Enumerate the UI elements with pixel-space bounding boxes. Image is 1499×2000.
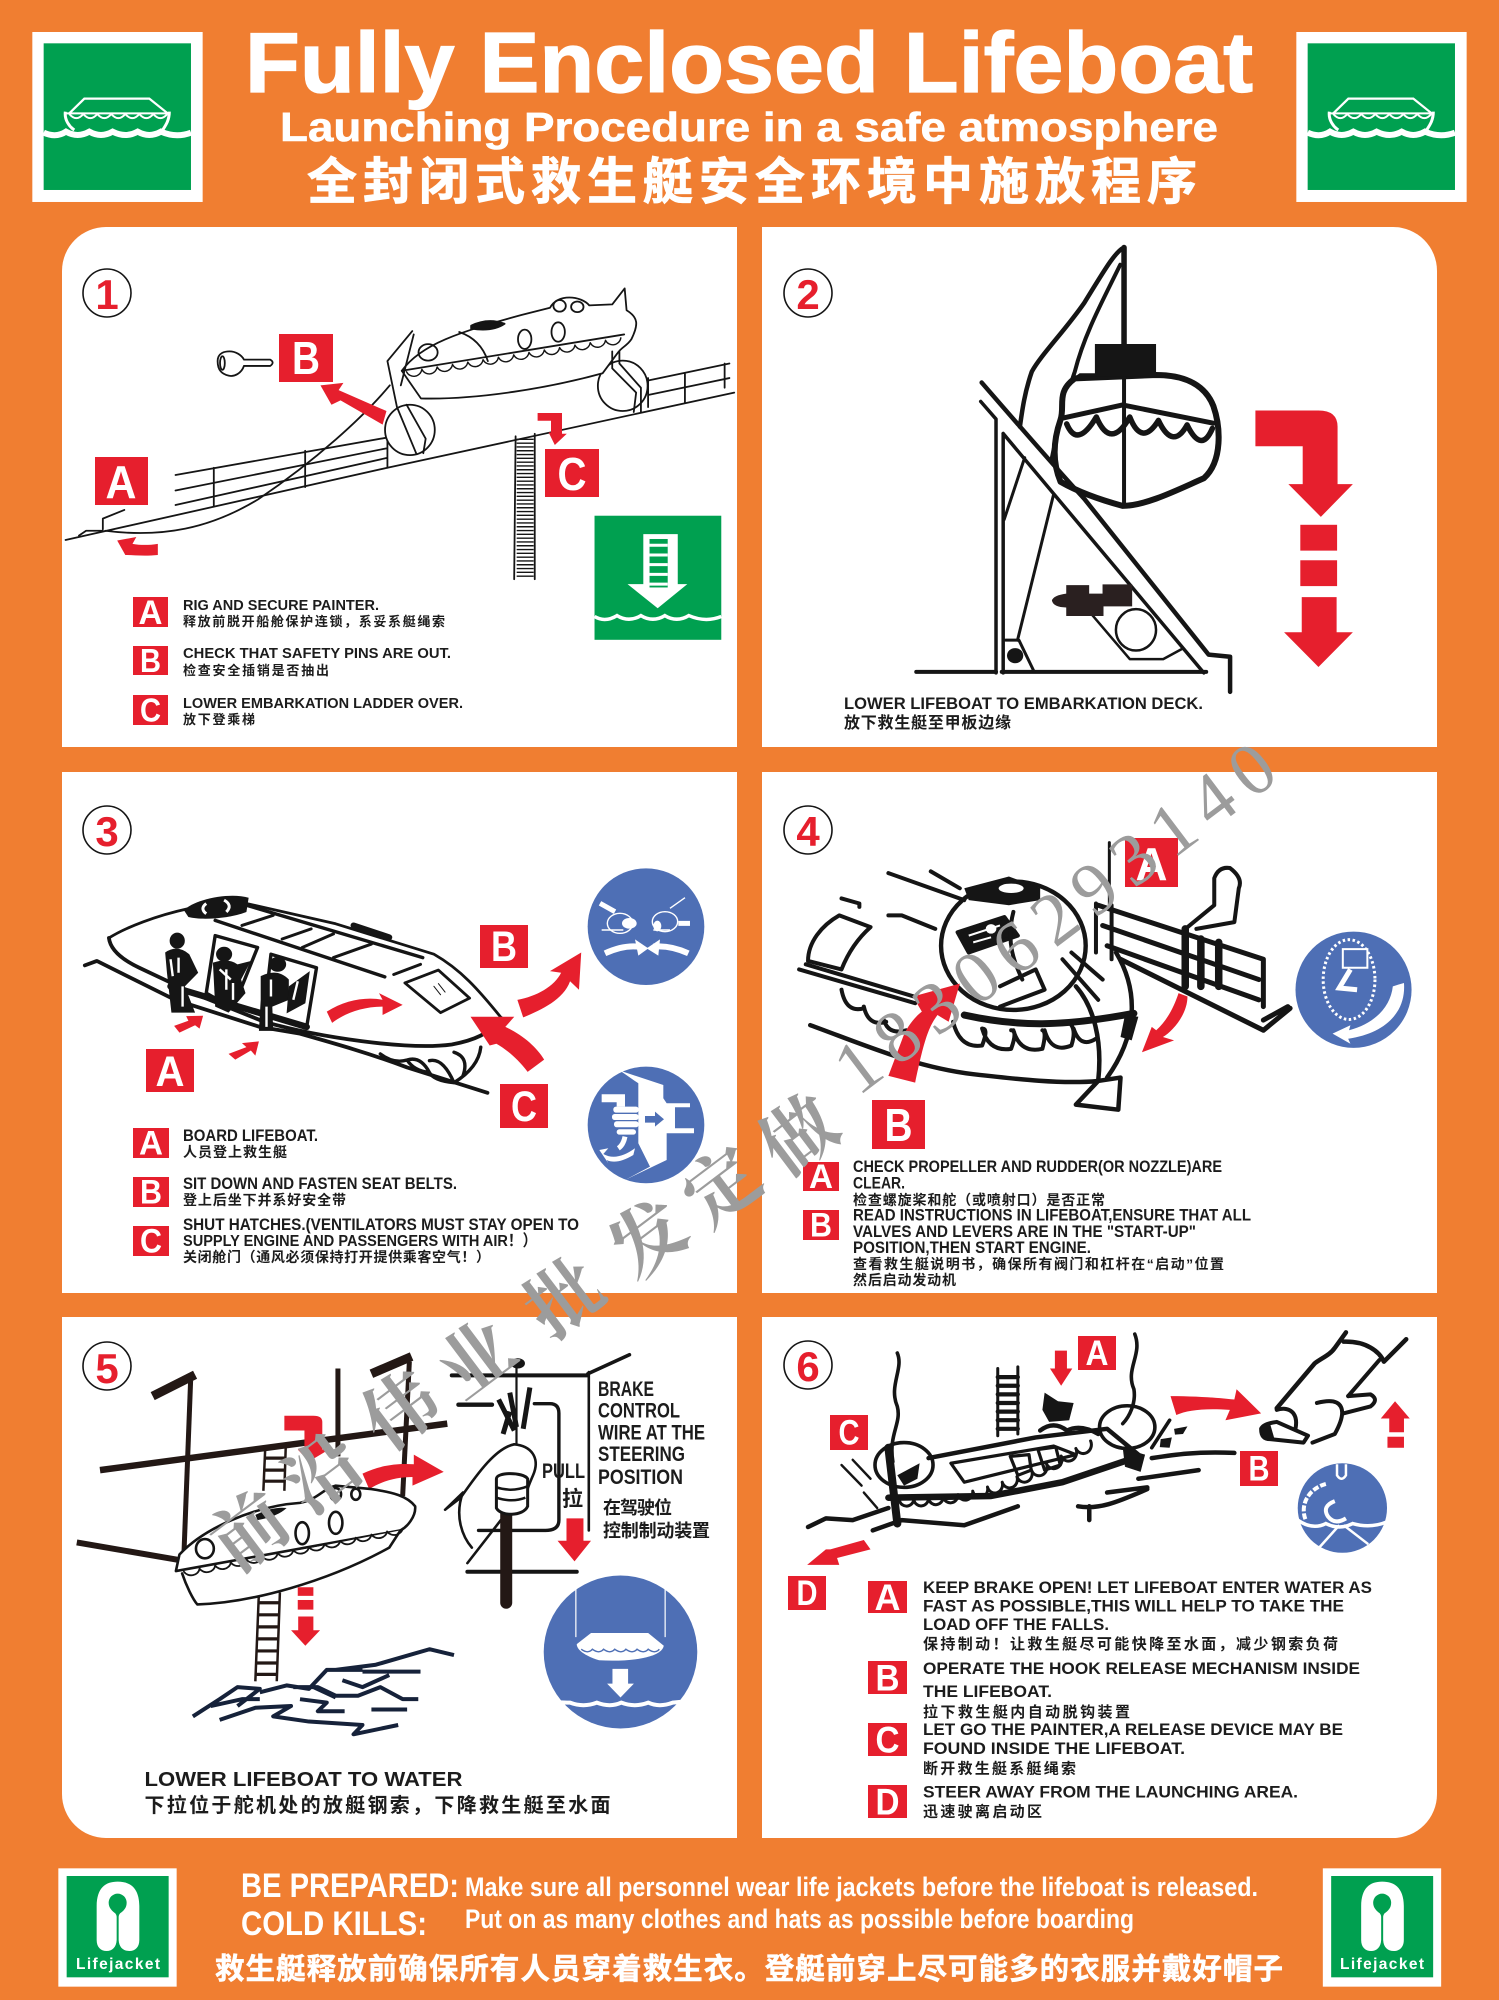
arrow C (538, 413, 567, 445)
legend item A (803, 1158, 1222, 1208)
illustration: boarding the lifeboat (85, 896, 502, 1093)
caption: step 5 (144, 1769, 610, 1817)
legend item B: VALVES AND LEVERS ARE IN THE "START-UP" (853, 1223, 1196, 1241)
legend item A: CLEAR. (853, 1174, 905, 1192)
icon: fasten seat belts (588, 868, 704, 985)
label C (830, 1414, 868, 1452)
legend item B: OPERATE THE HOOK RELEASE MECHANISM INSIDE (923, 1659, 1360, 1678)
label D: D (796, 1574, 818, 1613)
watermark: 发 (595, 1185, 704, 1295)
arrows: step 4 (888, 984, 1187, 1083)
legend item C: LOWER EMBARKATION LADDER OVER. (183, 696, 463, 712)
legend item A: BOARD LIFEBOAT. (183, 1127, 318, 1145)
legend item A: FAST AS POSSIBLE,THIS WILL HELP TO TAKE THE (923, 1596, 1344, 1616)
subtitle english: Launching Procedure in a safe atmosphere (280, 104, 1218, 150)
illustration: lifeboat lowered on davit (916, 248, 1230, 692)
legend item C: C (140, 692, 161, 728)
icon: safety pin key (218, 351, 273, 376)
icon: lower lifeboat to water (539, 1576, 702, 1728)
footer text: be prepared: Make sure all personnel wear life jackets before the lifeboat is released. (465, 1872, 1258, 1902)
legend item C (133, 692, 463, 728)
legend item A: 保持制动！让救生艇尽可能快降至水面，减少钢索负荷 (923, 1635, 1338, 1653)
watermark: 18306293140 (819, 726, 1292, 1111)
legend item B: THE LIFEBOAT. (923, 1682, 1052, 1701)
legend item C: SHUT HATCHES.(VENTILATORS MUST STAY OPEN TO (183, 1216, 579, 1234)
legend item D (868, 1782, 1298, 1822)
icon: lifejacket sign left: Lifejacket (76, 1956, 160, 1973)
watermark: 批 (511, 1245, 620, 1355)
label A (1125, 838, 1178, 890)
label B: B (1248, 1450, 1270, 1488)
legend item B: 然后启动发动机 (853, 1272, 956, 1288)
watermark: 业 (423, 1306, 532, 1416)
icon: close hatches (588, 1067, 704, 1183)
legend item B (803, 1206, 1251, 1288)
legend item A: 释放前脱开船舱保护连锁，系妥系艇绳索 (183, 614, 445, 629)
legend item A: A (809, 1158, 833, 1196)
watermark: 做 (746, 1082, 855, 1192)
legend item A: A (139, 1124, 163, 1162)
step number 1 (83, 269, 131, 318)
step number 4: 4 (796, 808, 820, 855)
arrow: pull down (558, 1518, 591, 1561)
legend item A: A (874, 1577, 900, 1618)
label B (872, 1099, 925, 1151)
legend item C: LET GO THE PAINTER,A RELEASE DEVICE MAY BE (923, 1720, 1343, 1739)
illustration: frame, ladder and lifeboat (77, 1356, 447, 1681)
label A (146, 1048, 194, 1096)
pull label: PULL (542, 1460, 585, 1483)
brake control text: WIRE AT THE (598, 1422, 705, 1444)
label A: A (156, 1048, 184, 1096)
label C: C (838, 1414, 860, 1452)
legend item D: 迅速驶离启动区 (923, 1802, 1042, 1820)
legend item C: C (140, 1222, 162, 1260)
icon: lifejacket sign left (58, 1868, 177, 1987)
arrows: step 3 (174, 953, 581, 1072)
legend: step 4 (803, 1158, 1251, 1288)
legend item C (133, 1216, 579, 1265)
label B: B (884, 1099, 912, 1151)
icon: lifejacket sign right (1323, 1868, 1441, 1987)
legend item A: LOAD OFF THE FALLS. (923, 1615, 1109, 1634)
icon: hook release (1298, 1463, 1387, 1553)
legend item B: B (140, 642, 161, 679)
legend item A (133, 594, 445, 632)
label A: A (1136, 838, 1168, 890)
label A (95, 456, 148, 508)
label B (279, 332, 333, 384)
legend item C (868, 1720, 1343, 1778)
arrows: step 6 (807, 1351, 1410, 1565)
panel: step 5 (62, 1317, 737, 1838)
lifeboat (176, 1486, 415, 1604)
step number 5: 5 (95, 1345, 119, 1392)
legend item A: RIG AND SECURE PAINTER. (183, 598, 379, 614)
legend item A: A (138, 594, 162, 632)
legend item A (133, 1124, 318, 1162)
label D (788, 1574, 826, 1613)
step number 5 (83, 1342, 131, 1392)
label B: B (491, 923, 517, 971)
step number 3 (83, 806, 131, 855)
label C: C (558, 448, 586, 500)
legend item B: SIT DOWN AND FASTEN SEAT BELTS. (183, 1175, 457, 1193)
step number 6 (784, 1341, 832, 1390)
arrow: red right (362, 1455, 444, 1489)
step number 4 (784, 806, 832, 855)
illustration: lifeboat entering water (808, 1334, 1234, 1530)
legend item B (133, 1174, 457, 1212)
legend: step 1 (133, 594, 463, 728)
icon: lifeboat sign right (1296, 32, 1467, 202)
legend item C: 放下登乘梯 (183, 712, 255, 727)
legend item C: 断开救生艇系艇绳索 (923, 1760, 1076, 1778)
label C: C (511, 1083, 537, 1131)
legend item B: B (140, 1174, 162, 1212)
footer text: cold kills: Put on as many clothes and hats as possible before boarding (465, 1904, 1134, 1934)
panel: step 4 (762, 772, 1437, 1293)
watermark: 伟 (347, 1357, 456, 1467)
arrow A (117, 537, 158, 556)
footer text: chinese: 救生艇释放前确保所有人员穿着救生衣。登艇前穿上尽可能多的衣服并戴好帽子 (215, 1953, 1283, 1986)
footer text: cold kills (241, 1904, 1134, 1943)
label B (1240, 1450, 1278, 1488)
legend item A (868, 1577, 1372, 1653)
step number 6: 6 (796, 1343, 820, 1390)
icon: embarkation ladder sign (595, 516, 721, 640)
legend item B: 检查安全插销是否抽出 (183, 663, 329, 678)
watermark: 前 (197, 1478, 306, 1588)
step number 2: 2 (796, 271, 820, 318)
arrow: red elbow (284, 1416, 329, 1462)
brake control text (598, 1378, 710, 1541)
panel: step 6 (762, 1317, 1437, 1838)
illustration: hand pulling brake wire (445, 1355, 629, 1603)
caption: step 2: LOWER LIFEBOAT TO EMBARKATION DECK. (844, 694, 1203, 713)
legend item C: 关闭舱门（通风必须保持打开提供乘客空气！） (183, 1249, 490, 1265)
pull label: 拉 (562, 1487, 583, 1511)
pull label (542, 1460, 585, 1511)
legend item B: 查看救生艇说明书，确保所有阀门和杠杆在“启动”位置 (853, 1256, 1224, 1272)
brake control text: STEERING (598, 1443, 685, 1466)
brake control text: CONTROL (598, 1400, 680, 1422)
label A: A (1086, 1334, 1108, 1373)
legend item B (133, 642, 451, 679)
caption: step 5: 下拉位于舵机处的放艇钢索，下降救生艇至水面 (144, 1793, 610, 1817)
legend item B: CHECK THAT SAFETY PINS ARE OUT. (183, 646, 451, 662)
panel: step 2 (762, 227, 1437, 747)
illustration: hand operating release (1261, 1332, 1406, 1443)
legend item A: 人员登上救生艇 (183, 1144, 287, 1160)
legend item D: D (876, 1782, 900, 1822)
legend item B: POSITION,THEN START ENGINE. (853, 1239, 1091, 1257)
icon: lifejacket sign right: Lifejacket (1340, 1956, 1424, 1973)
label A (1078, 1334, 1116, 1373)
watermark: 沿 (269, 1420, 378, 1530)
legend item B: B (876, 1658, 900, 1698)
caption: step 5: LOWER LIFEBOAT TO WATER (144, 1769, 463, 1791)
label B: B (292, 332, 320, 384)
watermark (197, 726, 1292, 1588)
legend item B: 登上后坐下并系好安全带 (183, 1192, 346, 1208)
brake control text: 控制制动装置 (603, 1520, 710, 1541)
illustration: lifeboat on davits with ladder (66, 288, 734, 579)
legend item B: 拉下救生艇内自动脱钩装置 (923, 1703, 1130, 1721)
footer text: be prepared: BE PREPARED: (241, 1867, 459, 1905)
subtitle chinese: 全封闭式救生艇安全环境中施放程序 (307, 154, 1197, 210)
watermark: 定 (669, 1133, 778, 1243)
label C (545, 448, 599, 500)
caption: step 2 (844, 694, 1203, 732)
icon: start engine (1296, 932, 1412, 1048)
brake control text: 在驾驶位 (603, 1497, 672, 1518)
arrow B (320, 383, 386, 425)
legend item C: FOUND INSIDE THE LIFEBOAT. (923, 1739, 1185, 1758)
footer text: be prepared (241, 1867, 1258, 1905)
footer text: cold kills: COLD KILLS: (241, 1905, 427, 1943)
legend item B (868, 1658, 1360, 1721)
legend item A: CHECK PROPELLER AND RUDDER(OR NOZZLE)ARE (853, 1158, 1222, 1176)
title: Fully Enclosed Lifeboat (245, 16, 1253, 111)
legend item D: STEER AWAY FROM THE LAUNCHING AREA. (923, 1782, 1298, 1802)
brake control text: POSITION (598, 1466, 683, 1489)
illustration: water waves (193, 1649, 454, 1734)
legend item C: SUPPLY ENGINE AND PASSENGERS WITH AIR！） (183, 1232, 537, 1250)
caption: step 2: 放下救生艇至甲板边缘 (844, 713, 1011, 732)
arrow: lower down (1255, 410, 1353, 667)
step number 1: 1 (95, 271, 119, 318)
legend: step 6 (868, 1577, 1372, 1822)
legend: step 3 (133, 1124, 579, 1265)
legend item A: 检查螺旋桨和舵（或喷射口）是否正常 (853, 1192, 1105, 1208)
arrow: red dashed down (291, 1587, 320, 1646)
legend item B: B (810, 1206, 832, 1244)
legend item A: KEEP BRAKE OPEN! LET LIFEBOAT ENTER WATER AS (923, 1578, 1372, 1597)
legend item B: READ INSTRUCTIONS IN LIFEBOAT,ENSURE THAT ALL (853, 1206, 1251, 1224)
icon: lifeboat sign left (32, 32, 203, 202)
illustration: checking propeller and engine (799, 843, 1290, 1110)
label C (500, 1083, 548, 1131)
label B (480, 923, 528, 971)
brake control text: BRAKE (598, 1378, 654, 1401)
step number 2 (784, 269, 832, 318)
panel: step 3 (62, 772, 737, 1293)
panel: step 1 (62, 227, 737, 747)
legend item C: C (876, 1720, 900, 1760)
label A: A (106, 456, 136, 508)
step number 3: 3 (95, 808, 119, 855)
